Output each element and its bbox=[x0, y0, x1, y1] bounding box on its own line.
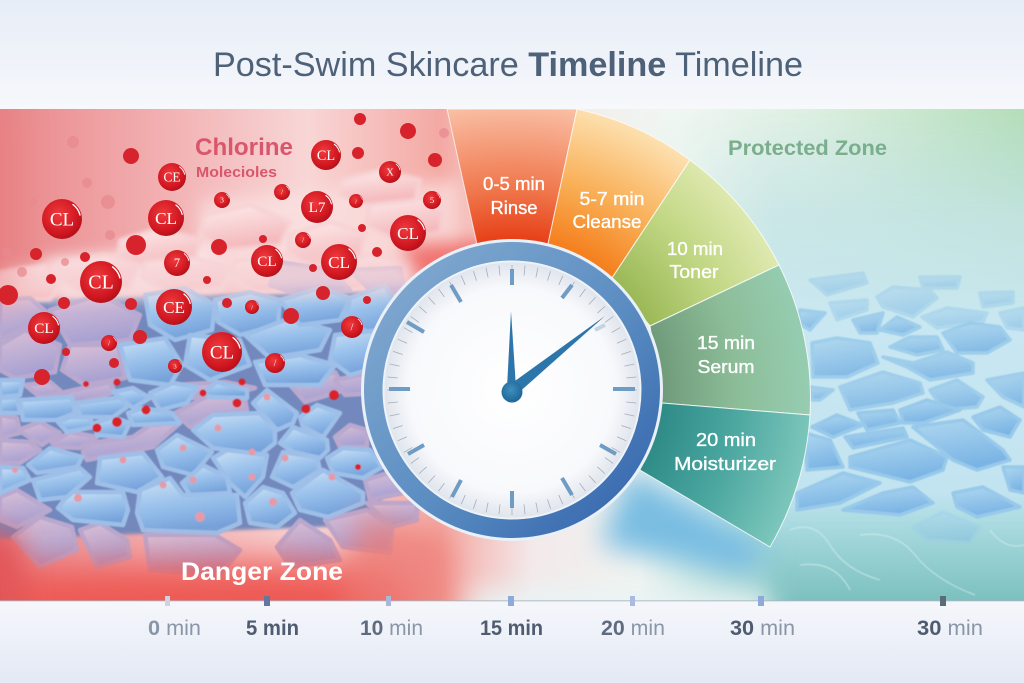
molecule CE bbox=[158, 163, 186, 191]
wedge: toner bbox=[612, 160, 779, 326]
clock ring bbox=[361, 239, 663, 541]
axis ticks bbox=[165, 596, 946, 606]
molecule CL bbox=[251, 245, 283, 277]
wedge: moisturizer: 20 min bbox=[696, 430, 756, 450]
axis labels: 5 min bbox=[246, 616, 299, 640]
skin cells: protected zone bbox=[790, 273, 1024, 595]
axis labels: 0 min bbox=[148, 616, 201, 640]
faded droplets bbox=[2, 128, 449, 277]
wedge: cleanse bbox=[548, 109, 690, 278]
timeline wedges bbox=[447, 109, 810, 547]
axis labels: 10 min bbox=[360, 616, 423, 640]
hour ticks bbox=[389, 269, 635, 508]
molecule 5 bbox=[423, 191, 441, 209]
panel: danger to protected backdrop bbox=[0, 109, 1024, 601]
molecule CL bbox=[148, 200, 184, 236]
wedge: serum: Serum bbox=[698, 357, 754, 377]
molecule CL bbox=[321, 244, 357, 280]
time axis bbox=[0, 596, 1024, 640]
molecule 1 bbox=[349, 194, 363, 208]
lower fade band bbox=[0, 128, 811, 601]
molecule 1 bbox=[341, 316, 363, 338]
molecule 3 bbox=[168, 359, 182, 373]
wedge: toner: 10 min bbox=[667, 239, 723, 259]
chlorine molecules bbox=[0, 113, 449, 385]
small droplets bbox=[0, 113, 442, 385]
wedge: serum: 15 min bbox=[697, 333, 755, 353]
wedge: cleanse: Cleanse bbox=[572, 212, 642, 232]
axis labels bbox=[148, 616, 983, 640]
axis labels: 30 min bbox=[730, 616, 795, 640]
title: Post-Swim Skincare Timeline Timeline bbox=[213, 46, 803, 84]
molecule 1 bbox=[295, 232, 311, 248]
molecule 1 bbox=[101, 335, 117, 351]
minute hand bbox=[507, 311, 516, 388]
wedge: toner: Toner bbox=[670, 262, 719, 282]
wedge: moisturizer: Moisturizer bbox=[674, 454, 776, 474]
molecule CL bbox=[80, 261, 122, 303]
heading: chlorine molecules: Chlorine bbox=[195, 134, 293, 161]
molecule CL bbox=[202, 332, 242, 372]
wedge: rinse: 0-5 min bbox=[483, 174, 545, 194]
molecule CL bbox=[311, 140, 341, 170]
wedge: moisturizer bbox=[640, 403, 810, 547]
wedge: rinse bbox=[447, 109, 577, 244]
molecule L7 bbox=[301, 191, 333, 223]
heading: chlorine molecules: Molecioles bbox=[196, 164, 277, 181]
molecule 1 bbox=[245, 300, 259, 314]
wedge: serum bbox=[650, 265, 810, 415]
axis labels: 20 min bbox=[601, 616, 665, 640]
skin cells: damaged zone bbox=[0, 170, 445, 575]
chlorine marks on skin bbox=[12, 394, 336, 522]
clock face bbox=[384, 262, 640, 518]
heading: chlorine molecules bbox=[195, 134, 293, 181]
molecule CL bbox=[42, 199, 82, 239]
danger zone label: Danger Zone bbox=[181, 558, 343, 586]
molecule 7 bbox=[164, 250, 190, 276]
wedge: rinse: Rinse bbox=[490, 198, 538, 218]
molecule CL bbox=[390, 215, 426, 251]
clock bbox=[361, 239, 663, 541]
axis labels: 15 min bbox=[480, 616, 543, 640]
heading: protected zone: Protected Zone bbox=[728, 136, 887, 160]
molecule 1 bbox=[265, 353, 285, 373]
second hand bbox=[508, 316, 605, 395]
clock hub bbox=[502, 382, 522, 402]
wedge: cleanse: 5-7 min bbox=[580, 189, 644, 209]
molecule X bbox=[379, 161, 401, 183]
molecule CE bbox=[156, 289, 192, 325]
molecule 3 bbox=[214, 192, 230, 208]
molecule 1 bbox=[274, 184, 290, 200]
axis labels: 30 min bbox=[917, 616, 983, 640]
molecule CL bbox=[28, 312, 60, 344]
